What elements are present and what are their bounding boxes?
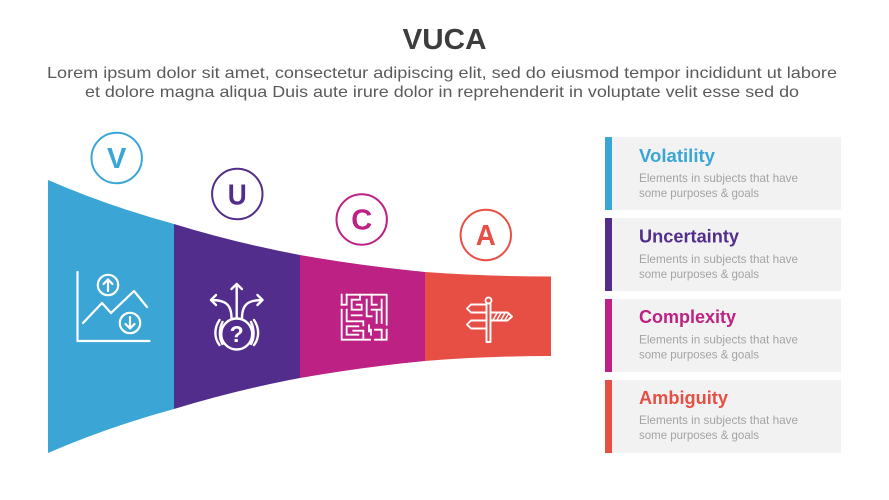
- icon: uncertainty arrows: ?: [230, 321, 244, 347]
- panel: complexity: some purposes & goals: [639, 348, 759, 362]
- funnel chart: [48, 180, 551, 453]
- icon: uncertainty arrows: [211, 284, 262, 350]
- letter circle: C: C: [351, 204, 372, 236]
- letter circle: V: V: [107, 143, 127, 175]
- panel: volatility: Elements in subjects that have: [639, 171, 798, 185]
- funnel segment: complexity: [300, 255, 425, 378]
- icon: volatility chart: [78, 272, 150, 341]
- letter circle: V: [92, 133, 142, 183]
- panel: complexity: Elements in subjects that have: [639, 332, 798, 346]
- panel: ambiguity: Elements in subjects that have: [639, 413, 798, 427]
- icon: signpost: [467, 298, 512, 342]
- letter circle: A: A: [476, 220, 496, 252]
- title: VUCA: [402, 24, 487, 56]
- funnel segment: ambiguity: [425, 272, 551, 361]
- subtitle text: Lorem ipsum dolor sit amet, consectetur adipiscing elit, sed do eiusmod tempor incididunt ut labore: [47, 65, 837, 82]
- panel: complexity: Complexity: [639, 307, 736, 327]
- panel: volatility: Volatility: [639, 146, 715, 166]
- letter circle: A: [461, 210, 511, 260]
- panel: ambiguity: [605, 380, 841, 453]
- funnel segment: uncertainty: [174, 224, 300, 409]
- panel: complexity: [605, 299, 841, 372]
- panel: volatility: some purposes & goals: [639, 186, 759, 200]
- panel: ambiguity: some purposes & goals: [639, 428, 759, 442]
- letter circle: U: U: [228, 180, 247, 212]
- funnel segment: volatility: [48, 180, 174, 453]
- panel: uncertainty: Elements in subjects that have: [639, 252, 798, 266]
- panel: uncertainty: [605, 218, 841, 291]
- icon: maze: [342, 295, 387, 340]
- letter circle: U: [212, 169, 262, 219]
- subtitle text: et dolore magna aliqua Duis aute irure dolor in reprehenderit in voluptate velit esse sed do: [85, 84, 799, 101]
- panel: volatility: [605, 137, 841, 210]
- letter circle: C: [336, 194, 387, 245]
- panel: ambiguity: Ambiguity: [639, 388, 728, 408]
- subtitle text: [47, 65, 837, 101]
- panel: uncertainty: some purposes & goals: [639, 267, 759, 281]
- panel: uncertainty: Uncertainty: [639, 226, 739, 246]
